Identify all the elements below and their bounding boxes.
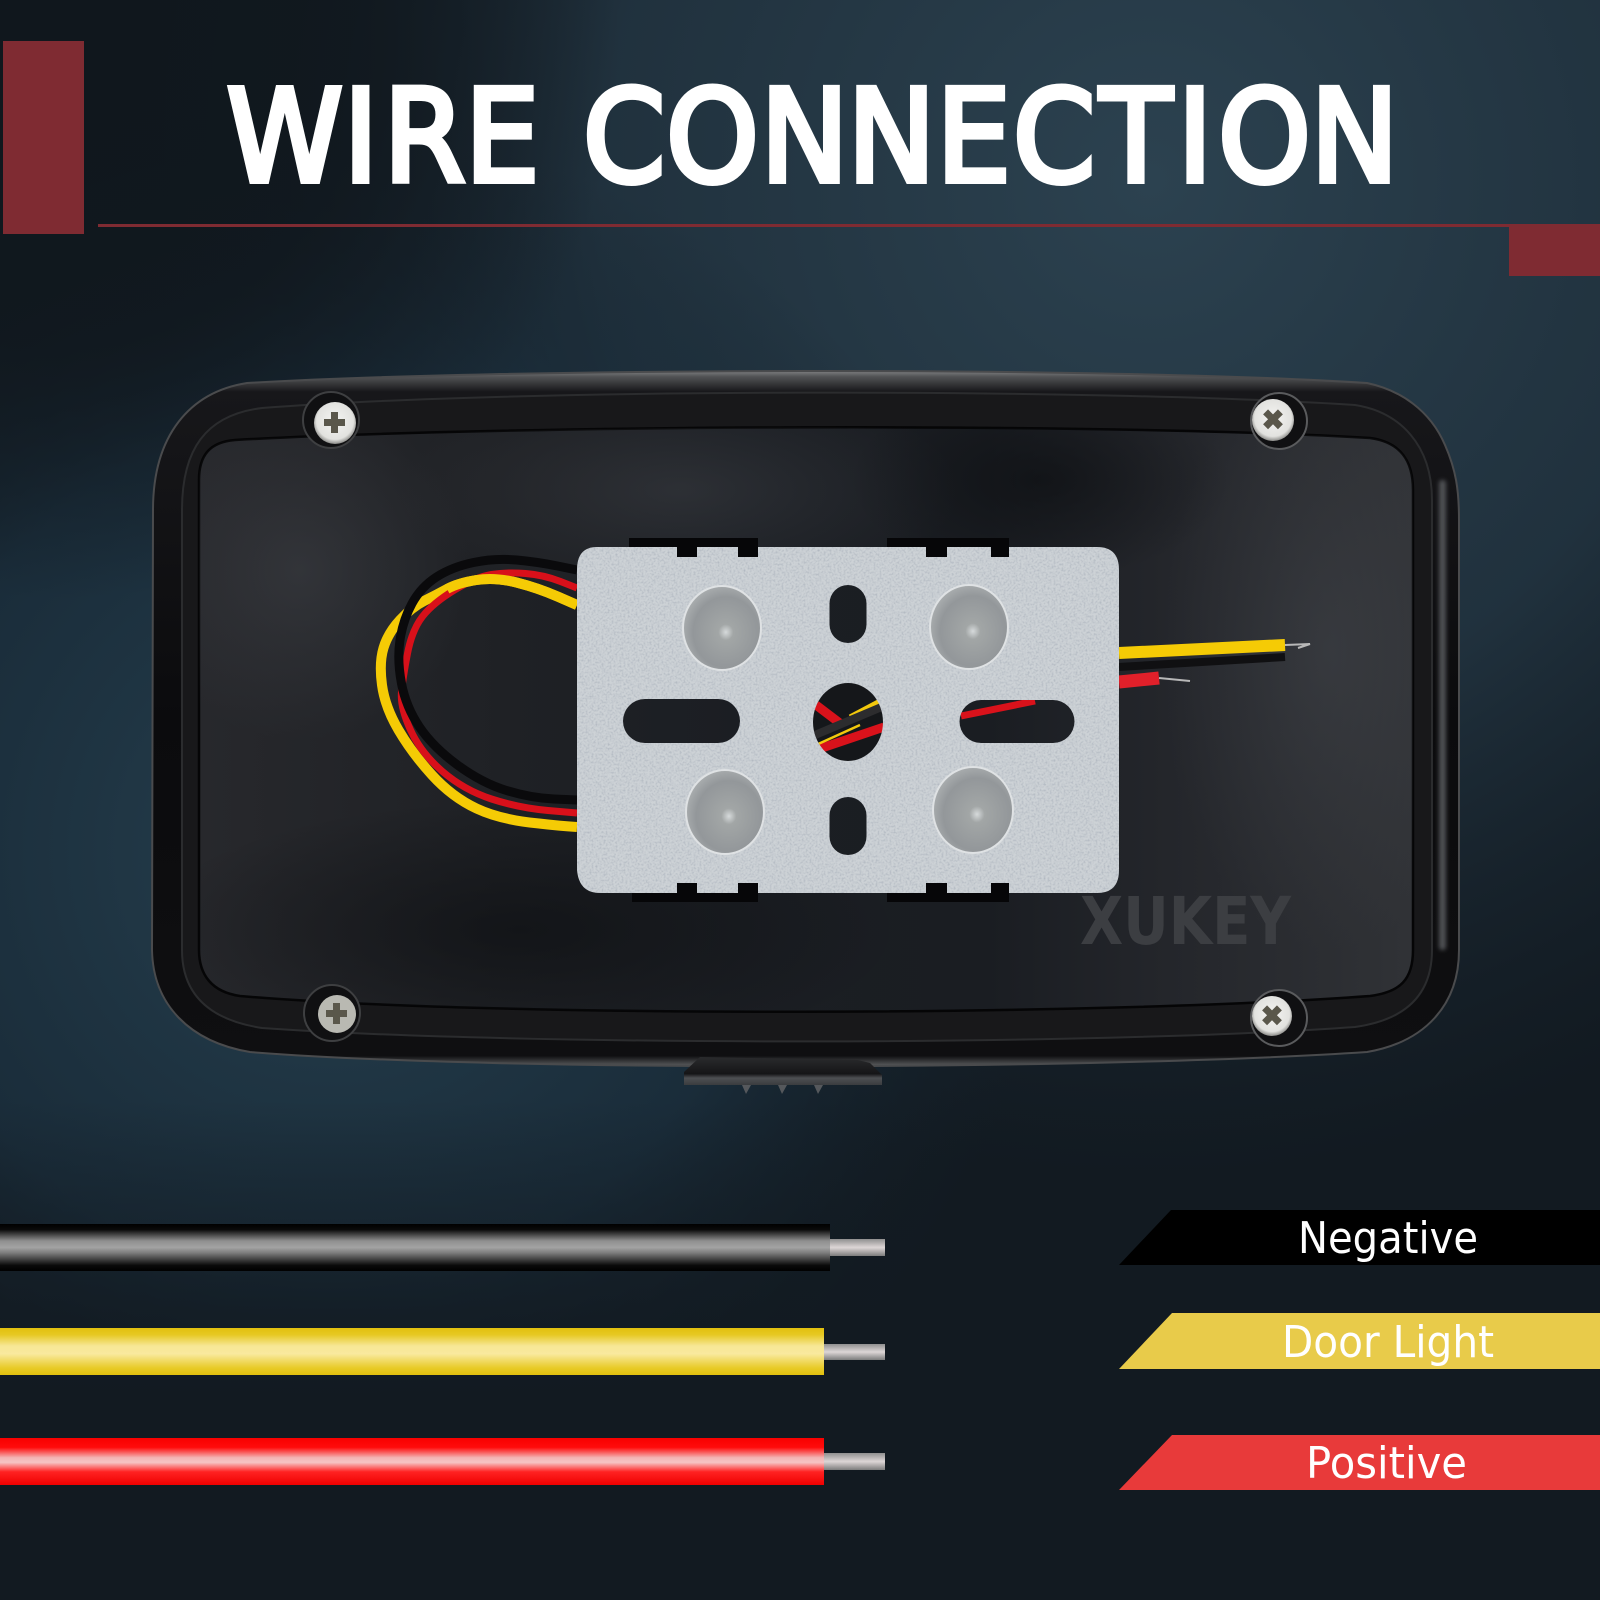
housing groove band: [182, 393, 1432, 1041]
legend label: door light: Door Light: [1282, 1317, 1494, 1368]
panel tonal blotches: [199, 428, 1413, 976]
legend label: door light: [1119, 1313, 1600, 1369]
wire sample: red: [0, 1438, 885, 1485]
bottom clip: [684, 1057, 882, 1094]
exiting wires: [1119, 644, 1310, 682]
wire loop: [381, 559, 577, 827]
title: WIRE: [227, 63, 539, 212]
plate speckle: [577, 547, 1119, 893]
screw: bottom left: [304, 985, 360, 1041]
title: CONNECTION: [583, 63, 1399, 212]
wire sample: yellow: [0, 1328, 885, 1375]
plate clips: [629, 538, 1009, 902]
mounting plate: [577, 547, 1119, 893]
legend label: positive: [1119, 1435, 1600, 1490]
legend label: negative: [1119, 1210, 1600, 1265]
dimple: top left: [683, 586, 761, 670]
dimple: bottom right: [933, 767, 1013, 853]
right edge highlight: [1439, 480, 1446, 950]
screws: [303, 392, 1307, 1046]
title: [227, 63, 1399, 212]
legend label: negative: Negative: [1298, 1213, 1478, 1264]
watermark: XUKEY: [1080, 883, 1292, 960]
title underline with corner block: [98, 224, 1600, 276]
product: light housing rear view: [130, 350, 1500, 1094]
wire sample: black: [0, 1224, 885, 1271]
dimple: top right: [930, 585, 1008, 669]
wires seen through plate holes: [813, 683, 1035, 761]
red accent block: top left: [3, 41, 84, 234]
housing inner panel: [199, 427, 1413, 1012]
housing outer rim: [152, 371, 1459, 1066]
screw: top left: [303, 392, 359, 448]
legend label: positive: Positive: [1306, 1438, 1467, 1489]
screw: bottom right: [1251, 990, 1307, 1046]
screw: top right: [1251, 393, 1307, 449]
dimple: bottom left: [686, 770, 764, 854]
